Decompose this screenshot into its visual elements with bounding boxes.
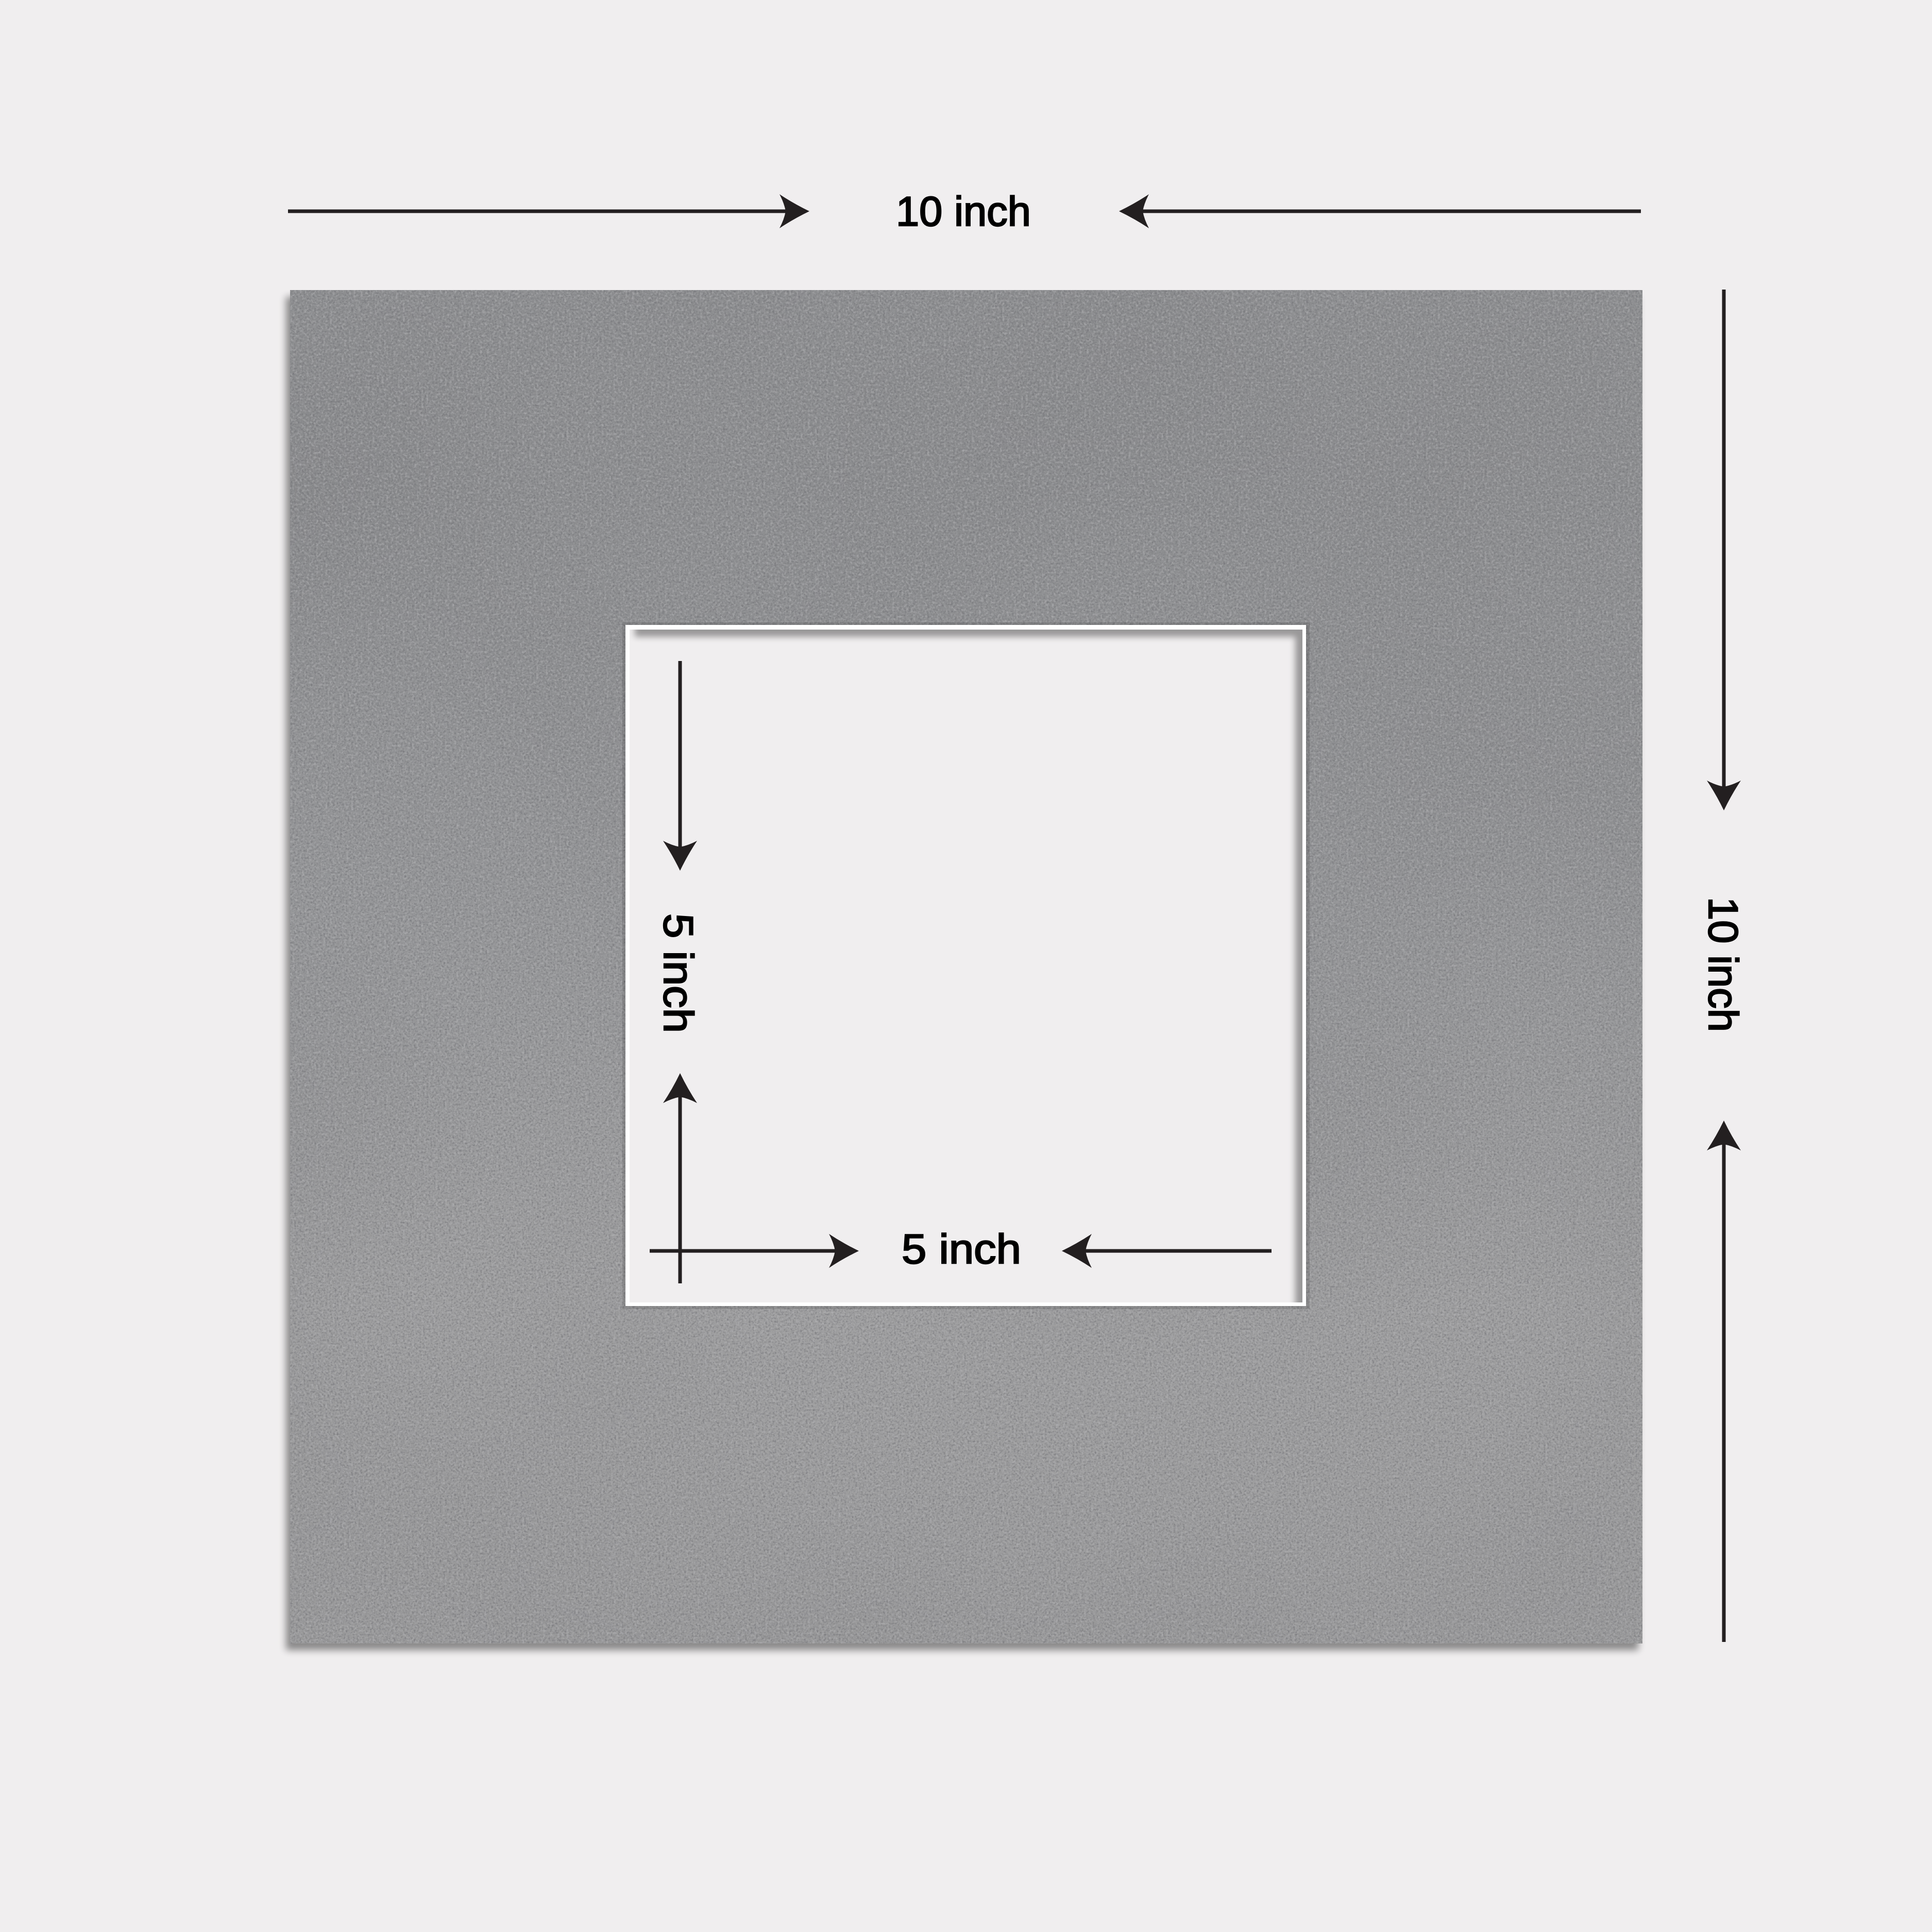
panel: window opening with white bevel [622,622,1310,1309]
label: opening width 5 inch: 5 inch [902,1226,1021,1273]
label: top width 10 inch: 10 inch [896,189,1031,235]
arrow: top dimension, pointing left [1119,194,1641,228]
arrow: opening width, pointing right [650,1234,859,1268]
label: opening height 5 inch: 5 inch [655,913,701,1033]
arrow: right dimension, pointing down [1707,290,1741,810]
label: right height 10 inch: 10 inch [1700,897,1746,1032]
arrow: opening width, pointing left [1062,1234,1272,1268]
arrow: opening height, pointing up [663,1073,697,1283]
arrow: right dimension, pointing up [1707,1121,1741,1642]
panel: grey mat board [286,290,1642,1650]
arrow: top dimension, pointing right [288,194,809,228]
arrow: opening height, pointing down [663,661,697,871]
